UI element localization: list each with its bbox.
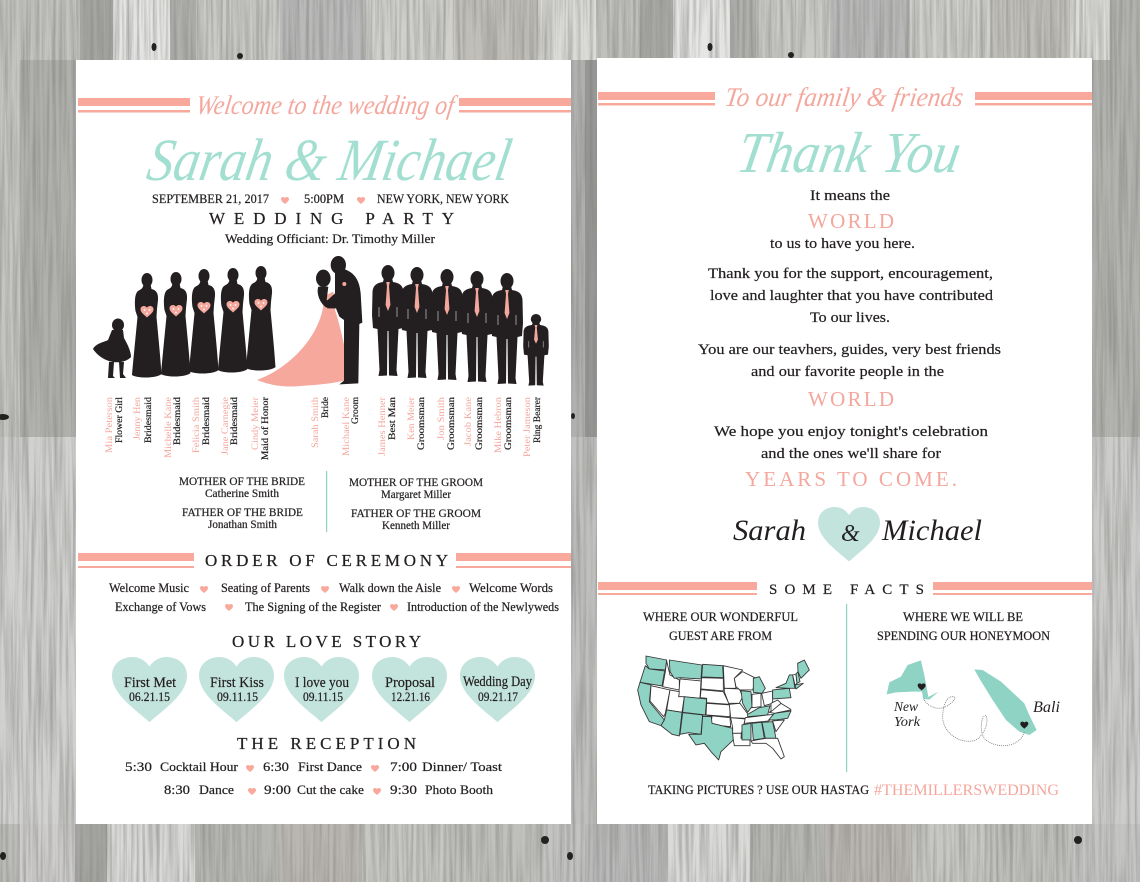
wedding party names: Groomsman [417, 397, 427, 450]
panel: thank you card [597, 58, 1092, 824]
label: new york [893, 700, 921, 730]
wedding party names: Mike Hebron [494, 397, 504, 453]
reception schedule: row one: 7:00 [390, 759, 417, 774]
heading: guest map: WHERE OUR WONDERFUL [643, 609, 798, 624]
wedding party names: Bridesmaid [230, 397, 240, 445]
reception schedule: row two [164, 782, 494, 797]
wedding party names: Michael Kane [342, 397, 352, 456]
header rule: right [459, 98, 571, 112]
label: bali: Bali [1033, 699, 1060, 716]
message: closing: and the ones we'll share for [761, 446, 941, 462]
parents of the groom: MOTHER OF THE GROOM [349, 475, 483, 489]
message: thank you paragraph: To our lives. [810, 310, 890, 326]
date, time and place line [152, 191, 510, 206]
message: it means the world: to us to have you here. [770, 236, 915, 252]
section header: some facts [598, 582, 1092, 598]
parents of the groom: FATHER OF THE GROOM [351, 506, 481, 520]
section header: order of ceremony [78, 551, 571, 570]
wedding party names: Jacob Kane [464, 397, 474, 446]
reception schedule: row two: 9:30 [390, 782, 417, 797]
wedding party names: Bride [321, 397, 331, 418]
flower girl [93, 318, 131, 378]
heart: proposal: Proposal [385, 675, 435, 691]
hashtag line: #THEMILLERSWEDDING [874, 782, 1059, 799]
dotted flight route [924, 697, 1024, 746]
ceremony list: row one [109, 580, 553, 595]
heart: first kiss: First Kiss [210, 675, 264, 691]
wedding party names: Flower Girl [115, 397, 125, 443]
reception schedule: row two: Cut the cake [297, 782, 364, 797]
date, time and place line: SEPTEMBER 21, 2017 [152, 191, 269, 206]
hashtag line: TAKING PICTURES ? USE OUR HASTAG [648, 782, 869, 797]
map: new york state [887, 660, 939, 700]
section header: order of ceremony: ORDER OF CEREMONY [205, 551, 448, 570]
heart: first met: 06.21.15 [129, 689, 170, 704]
reception schedule: row one [125, 759, 502, 774]
ceremony list: row two: Introduction of the Newlyweds [407, 599, 559, 614]
wedding party names: Cindy Meier [251, 396, 261, 450]
message: you are our: WORLD [808, 387, 894, 411]
reception schedule: row two: Photo Booth [425, 782, 494, 797]
heart: wedding day: Wedding Day [463, 674, 532, 690]
label: new york: New [893, 700, 919, 715]
message: thank you paragraph: Thank you for the support, encouragement, [708, 266, 993, 282]
wedding party names: Best Man [388, 397, 398, 440]
map: united states guest locations [638, 656, 809, 760]
heading: honeymoon: WHERE WE WILL BE [903, 609, 1023, 624]
label: new york: York [894, 715, 921, 730]
title: couple names: Sarah & Michael [143, 127, 516, 194]
signature with heart: & [841, 521, 860, 547]
wedding party names: Jon Smith [437, 397, 447, 440]
ceremony list: row two [115, 599, 559, 614]
message: thank you paragraph: love and laughter that you have contributed [710, 288, 994, 304]
wedding party names: Ken Meier [407, 396, 417, 440]
message: closing: We hope you enjoy tonight's celebration [714, 424, 989, 440]
wedding party names: Groomsman [447, 397, 457, 450]
wedding party names: Felicia Smith [192, 397, 202, 453]
wedding party names [105, 396, 543, 460]
heading: guest map [643, 609, 798, 643]
map: bali island [974, 669, 1037, 735]
heart: proposal [372, 657, 447, 722]
bridesmaids [132, 266, 276, 378]
ceremony list: row one: Seating of Parents [221, 580, 310, 595]
ceremony list: row one: Walk down the Aisle [339, 580, 441, 595]
heart: i love you: 09.11.15 [303, 689, 343, 704]
heart: i love you [284, 657, 359, 722]
wedding party names: Bridesmaid [144, 397, 154, 443]
hashtag line [648, 782, 1059, 799]
officiant: Wedding Officiant: Dr. Timothy Miller [225, 231, 436, 246]
title: thank you: Thank You [733, 120, 966, 185]
ceremony list: row one: Welcome Words [469, 580, 553, 595]
heading: the reception: THE RECEPTION [237, 734, 416, 753]
wedding party names: Michelle Kane [164, 397, 174, 458]
reception schedule: row one: Dinner/ Toast [422, 759, 502, 774]
reception schedule: row one: 6:30 [263, 759, 289, 774]
panel: wedding program card [76, 60, 571, 824]
signature with heart: Michael [881, 514, 982, 547]
heart: i love you: I love you [295, 675, 349, 691]
message: it means the world: WORLD [808, 209, 894, 233]
wedding party names: Jenny Hen [133, 397, 143, 440]
heading: our love story: OUR LOVE STORY [232, 632, 421, 651]
message: thank you paragraph [708, 266, 994, 326]
message: it means the world [770, 188, 915, 252]
groomsmen [372, 265, 523, 384]
wedding party names: Maid of Honor [260, 396, 271, 460]
parents of the bride: FATHER OF THE BRIDE [182, 505, 303, 519]
heart: first kiss [199, 657, 274, 722]
date, time and place line: NEW YORK, NEW YORK [377, 191, 510, 206]
heart: first kiss: 09.11.15 [217, 689, 258, 704]
parents of the bride [179, 474, 305, 531]
heading: honeymoon [877, 609, 1051, 643]
section header: some facts: SOME FACTS [769, 582, 924, 598]
ceremony list: row two: Exchange of Vows [115, 599, 206, 614]
heart: wedding day [460, 657, 535, 722]
wedding party names: James Henner [378, 396, 388, 456]
wedding party names: Groomsman [475, 397, 485, 450]
message: you are our: You are our teavhers, guides, very best friends [698, 342, 1001, 358]
wedding party names: Bridesmaid [202, 397, 212, 445]
wedding party names: Bridesmaid [173, 397, 183, 445]
reception schedule: row one: 5:30 [125, 759, 152, 774]
wedding party names: Groom [351, 396, 361, 424]
bride and groom [257, 256, 362, 387]
heading: wedding party: WEDDING PARTY [209, 209, 454, 228]
ring bearer [523, 314, 549, 386]
parents of the groom: Margaret Miller [381, 487, 451, 501]
parents of the groom [349, 475, 483, 532]
illustration: wedding party silhouettes [93, 256, 549, 387]
map: new york to bali honeymoon route [887, 660, 1037, 746]
wedding party names: Peter Jameson [523, 397, 533, 457]
reception schedule: row one: Cocktail Hour [160, 759, 239, 774]
heading: to our family and friends: To our family & friends [723, 82, 965, 112]
reception schedule: row two: Dance [199, 782, 234, 797]
parents of the bride: MOTHER OF THE BRIDE [179, 474, 305, 488]
wedding party names: Mia Peterson [105, 397, 115, 453]
header rule: left [78, 98, 190, 112]
heading: guest map: GUEST ARE FROM [669, 628, 772, 643]
heart: proposal: 12.21.16 [391, 689, 430, 704]
message: closing: YEARS TO COME. [745, 467, 957, 491]
reception schedule: row two: 9:00 [264, 782, 291, 797]
message: you are our [698, 342, 1001, 411]
wedding party names: Sarah Smith [311, 397, 321, 448]
ceremony list: row two: The Signing of the Register [245, 599, 382, 614]
heading: honeymoon: SPENDING OUR HONEYMOON [877, 628, 1051, 643]
parents of the groom: Kenneth Miller [382, 518, 450, 532]
parents of the bride: Jonathan Smith [208, 517, 277, 531]
ceremony list: row one: Welcome Music [109, 580, 189, 595]
parents of the bride: Catherine Smith [205, 486, 279, 500]
heading: welcome: Welcome to the wedding of [194, 90, 459, 120]
heart: first met: First Met [124, 675, 177, 691]
reception schedule: row one: First Dance [298, 759, 362, 774]
signature with heart: Sarah [733, 514, 806, 547]
heart: wedding day: 09.21.17 [478, 689, 518, 704]
love story hearts [112, 657, 535, 722]
header rules [598, 92, 1092, 106]
message: closing [714, 424, 989, 491]
message: you are our: and our favorite people in the [751, 364, 944, 380]
message: it means the world: It means the [810, 188, 890, 204]
location hearts [918, 683, 1028, 729]
wedding party names: Jane Carnegie [221, 397, 231, 455]
reception schedule: row two: 8:30 [164, 782, 190, 797]
wedding party names: Ring Bearer [533, 396, 543, 443]
signature with heart [733, 507, 982, 562]
date, time and place line: 5:00PM [304, 191, 344, 206]
heart: first met [112, 657, 187, 722]
wedding party names: Groomsman [504, 397, 514, 450]
